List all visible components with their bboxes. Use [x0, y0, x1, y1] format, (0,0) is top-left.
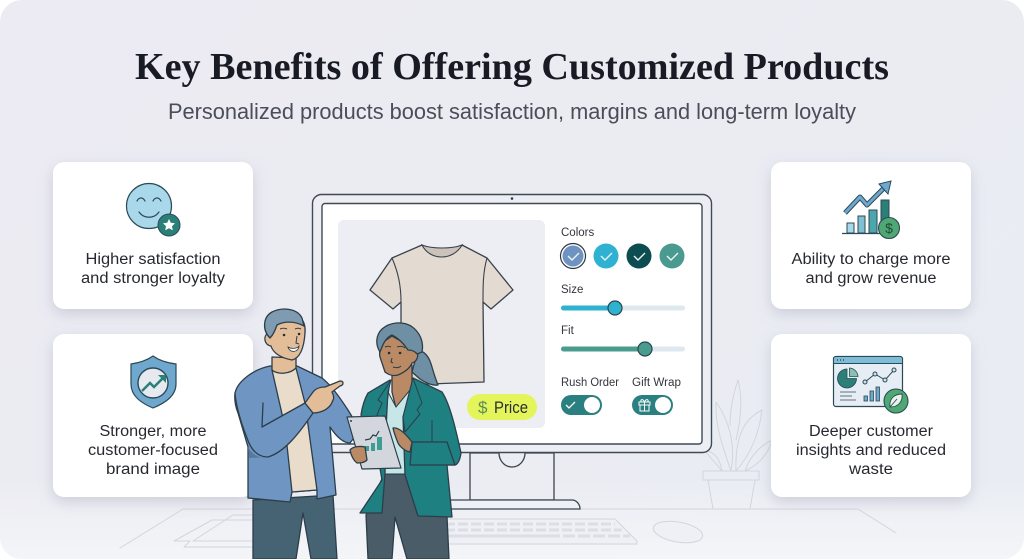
card text: customer-focused	[88, 442, 218, 459]
icon: growth chart with coin: $	[885, 220, 893, 236]
lower sleeve	[410, 442, 455, 465]
plant	[703, 380, 772, 509]
left hand	[350, 446, 367, 463]
colors option	[560, 227, 684, 268]
head	[380, 336, 418, 376]
hair	[265, 309, 304, 338]
neck	[272, 357, 296, 373]
monitor stand	[430, 453, 580, 509]
jacket sleeve	[235, 393, 313, 457]
size slider: Size	[561, 284, 583, 296]
trousers	[253, 495, 337, 559]
price tag	[467, 394, 537, 420]
top	[384, 390, 410, 474]
card text: and stronger loyalty	[81, 270, 225, 287]
shirt	[272, 368, 317, 492]
mouse	[652, 518, 704, 546]
gift wrap toggle	[632, 377, 681, 415]
fit slider: Fit	[561, 325, 575, 337]
icon: smiley with star badge	[126, 184, 180, 236]
card text: insights and reduced	[796, 442, 946, 459]
icon: growth chart with coin	[842, 181, 900, 238]
icon: dashboard with leaf	[834, 356, 908, 413]
card text: Ability to charge more	[792, 251, 950, 268]
card text	[792, 251, 950, 287]
price tag: $	[478, 398, 488, 417]
desk surface	[0, 480, 1024, 559]
card text	[796, 423, 946, 478]
hair	[377, 323, 423, 354]
lapels	[403, 378, 422, 432]
rush order toggle: Rush Order	[561, 377, 619, 389]
hair tail	[412, 350, 438, 385]
card text: Stronger, more	[100, 423, 206, 440]
product panel	[338, 220, 545, 428]
card text	[81, 251, 225, 287]
head	[265, 314, 305, 360]
card text	[88, 423, 218, 478]
card text: brand image	[106, 461, 200, 478]
t-shirt	[370, 245, 513, 385]
monitor	[312, 194, 712, 452]
price tag: Price	[494, 399, 528, 417]
colors option: Colors	[561, 227, 594, 239]
card text: waste	[848, 461, 893, 478]
hand pointing	[305, 381, 343, 413]
card: revenue	[771, 162, 971, 309]
trousers	[366, 474, 449, 559]
gift wrap toggle: Gift Wrap	[632, 377, 681, 389]
jacket	[235, 366, 360, 502]
person: woman with tablet	[347, 323, 461, 559]
rush order toggle	[561, 377, 619, 415]
jacket shadow	[248, 447, 280, 458]
card: brand image	[53, 334, 253, 497]
tablet	[347, 416, 401, 469]
title: Key Benefits of Offering Customized Products	[135, 46, 889, 88]
keyboard	[440, 519, 637, 544]
card: insights	[771, 334, 971, 497]
neck	[392, 365, 412, 408]
fit slider	[561, 325, 685, 356]
card text: and grow revenue	[806, 270, 936, 287]
face details	[389, 352, 400, 354]
size slider	[561, 284, 685, 315]
card text: Higher satisfaction	[86, 251, 220, 268]
right hand	[393, 428, 412, 452]
card: satisfaction	[53, 162, 253, 309]
subtitle: Personalized products boost satisfaction, margins and long-term loyalty	[168, 99, 856, 124]
face details	[284, 334, 299, 335]
card text: Deeper customer	[809, 423, 933, 440]
desk line art	[120, 509, 896, 548]
icon: shield	[131, 356, 176, 408]
jacket	[360, 380, 390, 513]
person: man pointing	[235, 309, 360, 559]
